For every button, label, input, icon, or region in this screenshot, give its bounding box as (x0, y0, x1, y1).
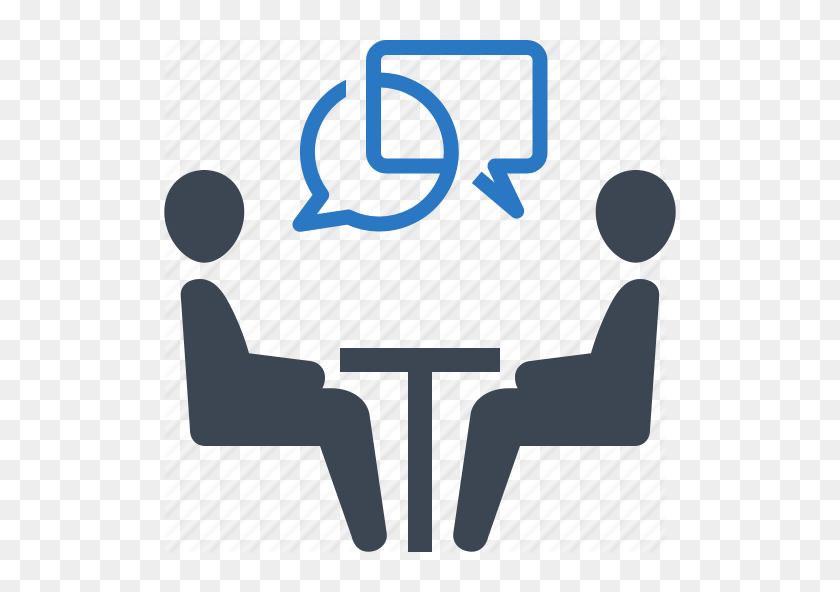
head: left (164, 170, 244, 263)
person: right (453, 170, 676, 552)
body: left (181, 279, 387, 552)
head: right (596, 170, 676, 263)
table leg (408, 372, 432, 552)
body: right (453, 279, 659, 552)
person: left (164, 170, 387, 552)
table (340, 348, 500, 552)
icon: round speech bubble (300, 80, 451, 224)
table top (340, 348, 500, 372)
icon: rectangular speech bubble (374, 48, 540, 211)
background: diagonal stripes (165, 40, 665, 552)
